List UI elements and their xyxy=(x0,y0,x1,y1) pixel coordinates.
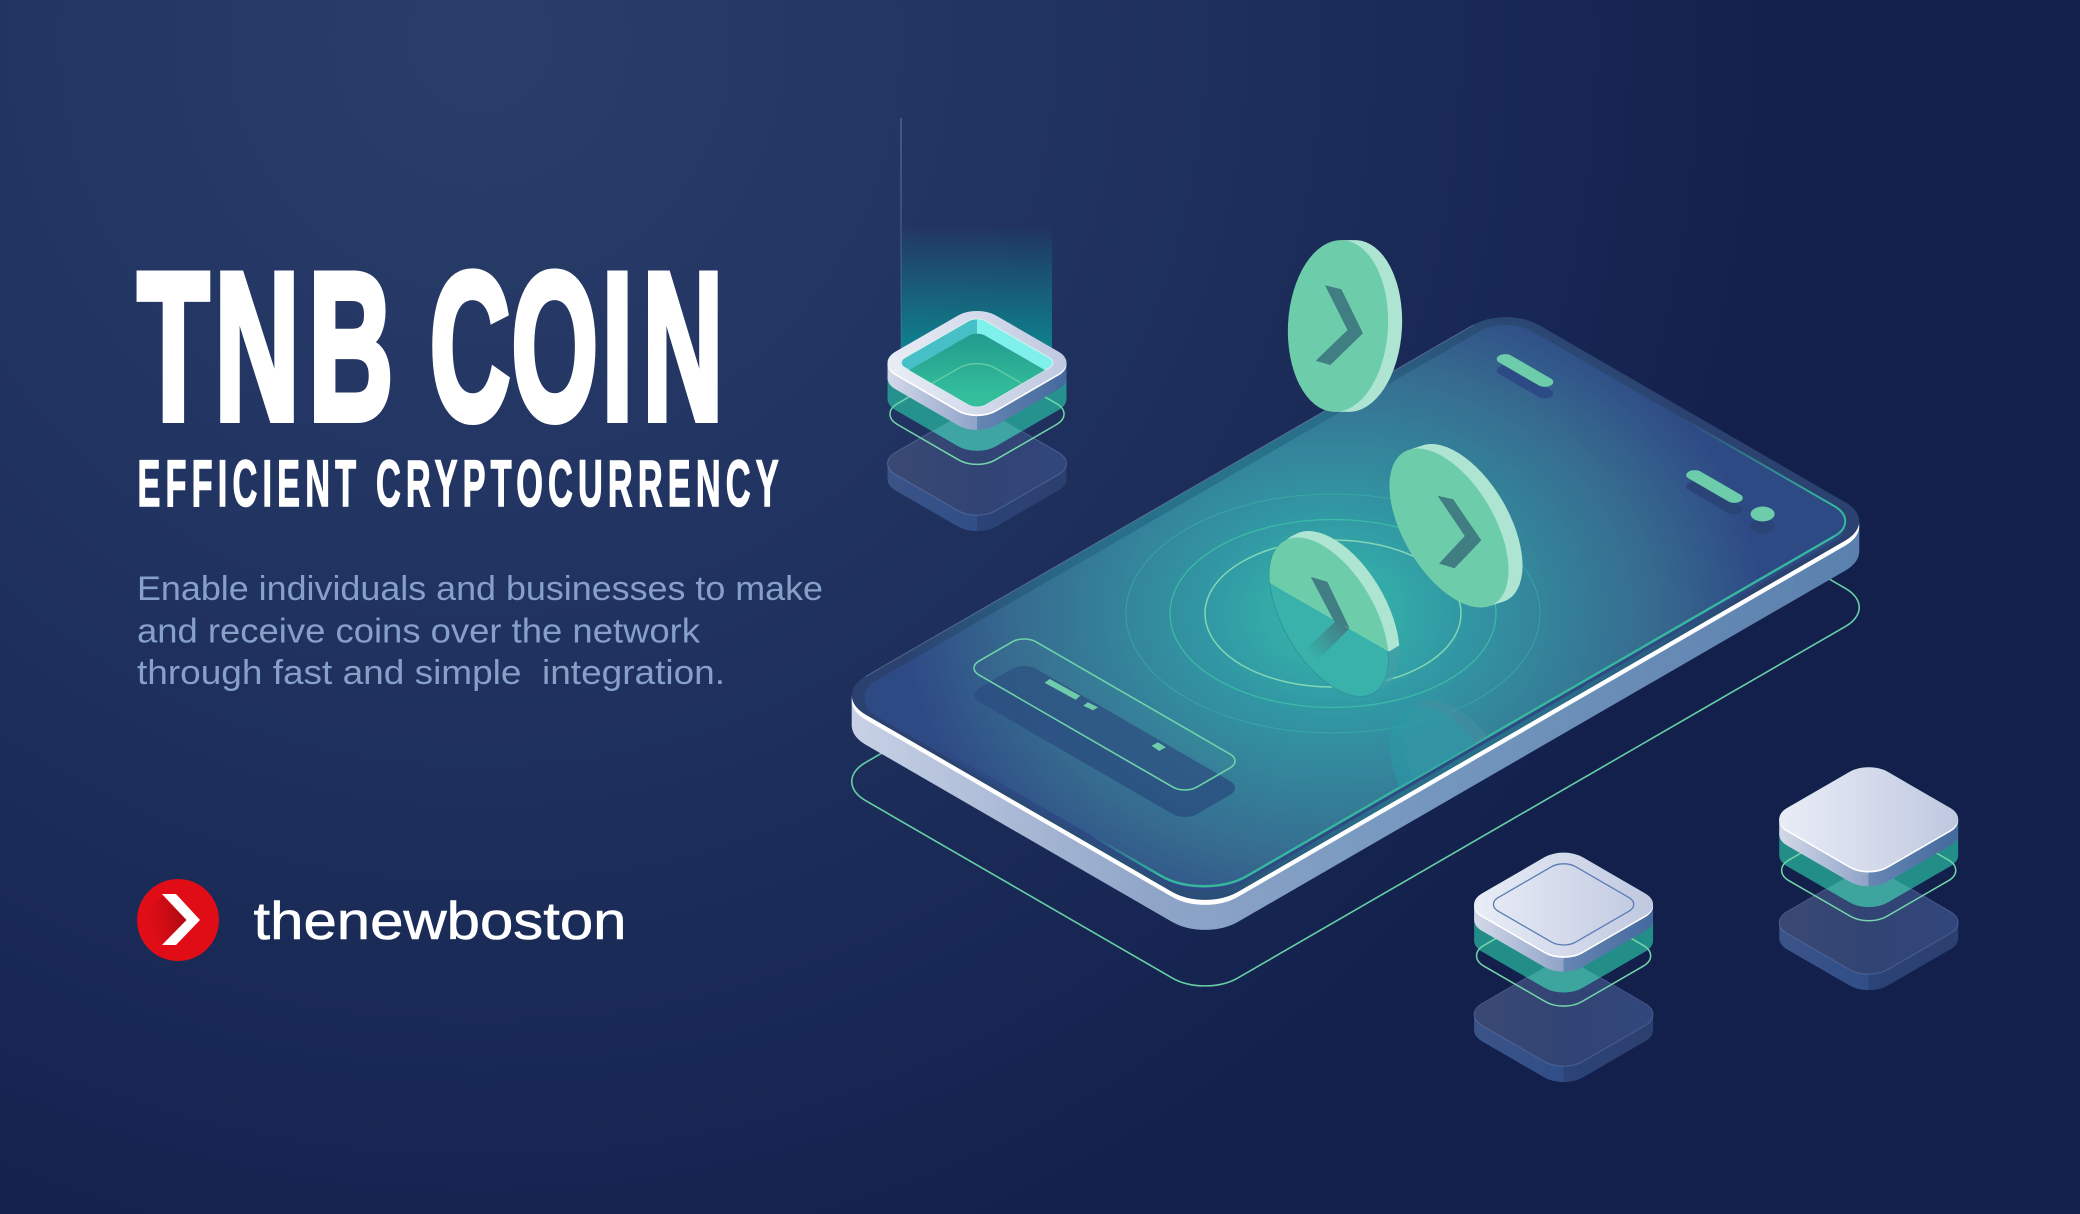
coin chevron xyxy=(1316,285,1363,365)
title: COIN xyxy=(430,229,723,464)
card outline xyxy=(967,635,1242,794)
card marks xyxy=(1044,679,1166,751)
phone xyxy=(852,317,1860,930)
block: open chip with beam xyxy=(887,311,1067,532)
inset outline xyxy=(1486,860,1641,949)
emerged coin part xyxy=(1270,531,1400,652)
subtitle: EFFICIENT CRYPTOCURRENCY xyxy=(137,447,779,521)
brand name: thenewboston xyxy=(254,892,626,951)
block top surface xyxy=(876,305,1078,421)
block teal layer xyxy=(1737,761,2001,913)
radar rings xyxy=(1126,494,1540,733)
coin: middle xyxy=(1365,424,1547,627)
highlight edge xyxy=(1768,763,1969,879)
phone body side xyxy=(816,317,1895,941)
layer overlap xyxy=(1826,878,1911,908)
block teal layer xyxy=(1432,846,1696,999)
speaker pill left xyxy=(1493,352,1557,400)
layer overlap xyxy=(932,421,1022,451)
outline ring xyxy=(1771,814,1966,927)
well floor xyxy=(909,334,1045,406)
coin chevron xyxy=(1311,577,1350,628)
phone screen xyxy=(865,325,1844,885)
layer overlap xyxy=(1527,967,1600,992)
phone outline ring beneath xyxy=(833,392,1878,997)
highlight edge xyxy=(1463,848,1664,964)
block teal layer xyxy=(845,305,1109,457)
light beam above block xyxy=(900,118,1052,355)
bezel top-left edge xyxy=(865,325,1473,677)
phone white edge xyxy=(833,311,1878,916)
screen edge highlights xyxy=(1022,416,1860,901)
camera dot xyxy=(1751,506,1775,534)
outline ring xyxy=(879,358,1075,471)
bezel inner band xyxy=(850,321,1860,906)
coin reflection xyxy=(1390,700,1488,788)
block top surface xyxy=(1463,846,1664,963)
speaker pill right xyxy=(1683,468,1746,516)
block top surface xyxy=(1768,761,1969,877)
phone bezel xyxy=(840,300,1880,920)
description text xyxy=(137,570,823,692)
description text: through fast and simple integration. xyxy=(137,654,725,692)
description text: and receive coins over the network xyxy=(137,612,701,650)
title: TNB xyxy=(137,230,393,465)
submerged coin part xyxy=(1245,511,1424,716)
block side xyxy=(1455,853,1672,978)
coin chevron xyxy=(1438,496,1481,568)
block base xyxy=(863,405,1091,538)
card shadow xyxy=(967,662,1242,821)
block base xyxy=(1754,864,1983,997)
block side xyxy=(869,311,1085,436)
coin: top xyxy=(1284,238,1406,414)
well walls xyxy=(896,316,1058,409)
outline ring xyxy=(1466,899,1661,1012)
coin: half sunk in screen xyxy=(1269,531,1400,697)
block: bottom with inset xyxy=(1474,852,1654,1082)
title xyxy=(137,229,723,465)
logo: thenewboston mark xyxy=(137,879,219,961)
block side xyxy=(1760,767,1977,893)
block base xyxy=(1449,956,1678,1089)
description text: Enable individuals and businesses to make xyxy=(137,570,823,608)
highlight edge xyxy=(876,306,1078,423)
block: right xyxy=(1778,767,1959,990)
